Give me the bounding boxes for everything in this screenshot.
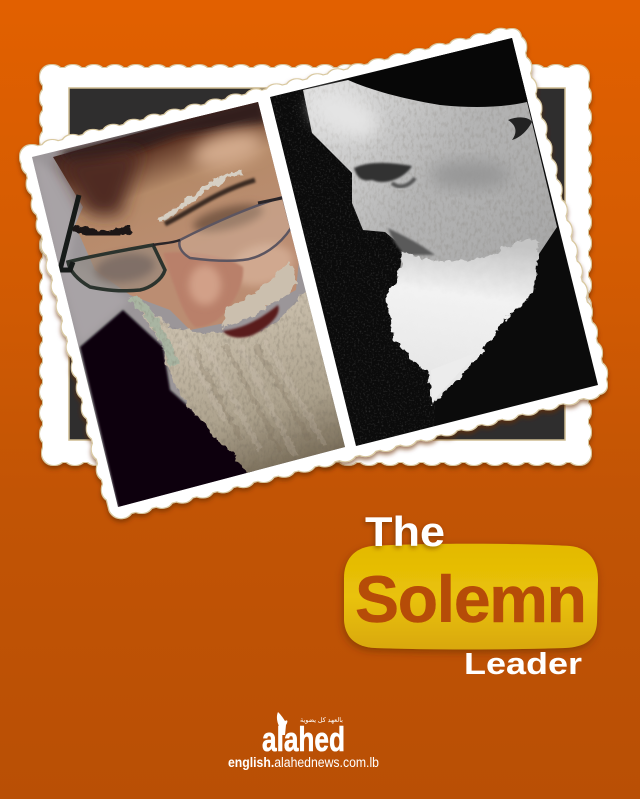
- eye shadow: [190, 199, 266, 237]
- eyebrows: [160, 172, 243, 220]
- moustache: [222, 262, 298, 328]
- title word: Leader: Leader: [464, 646, 582, 681]
- eyebrow: [354, 163, 412, 182]
- photo: smiling man with glasses: [32, 102, 345, 507]
- face: [303, 80, 557, 300]
- mouth and moustache: [388, 228, 435, 255]
- forehead and face: [53, 98, 300, 330]
- title word: Solemn: Solemn: [355, 562, 587, 636]
- beard: [130, 290, 352, 478]
- website url: english.alahednews.com.lb: [228, 755, 379, 770]
- mouth: [223, 305, 279, 338]
- logo tagline: بالعهد كل يضوية: [300, 716, 343, 724]
- yellow title badge: [344, 544, 598, 650]
- title word: The: The: [365, 508, 445, 555]
- front tilted photo frame: [20, 30, 610, 520]
- nose: [163, 252, 243, 327]
- white beard: [387, 239, 540, 405]
- turban: [366, 38, 528, 104]
- glasses: [60, 195, 291, 291]
- dark clothing: [80, 310, 262, 515]
- logo: alahed: [228, 712, 379, 770]
- photo: elderly man in profile, black and white: [270, 38, 598, 446]
- logo wordmark: alahed: [262, 721, 345, 759]
- cheek: [234, 244, 295, 288]
- ear: [508, 117, 532, 140]
- back photo frame: [52, 77, 579, 453]
- icon: flame: [277, 712, 287, 735]
